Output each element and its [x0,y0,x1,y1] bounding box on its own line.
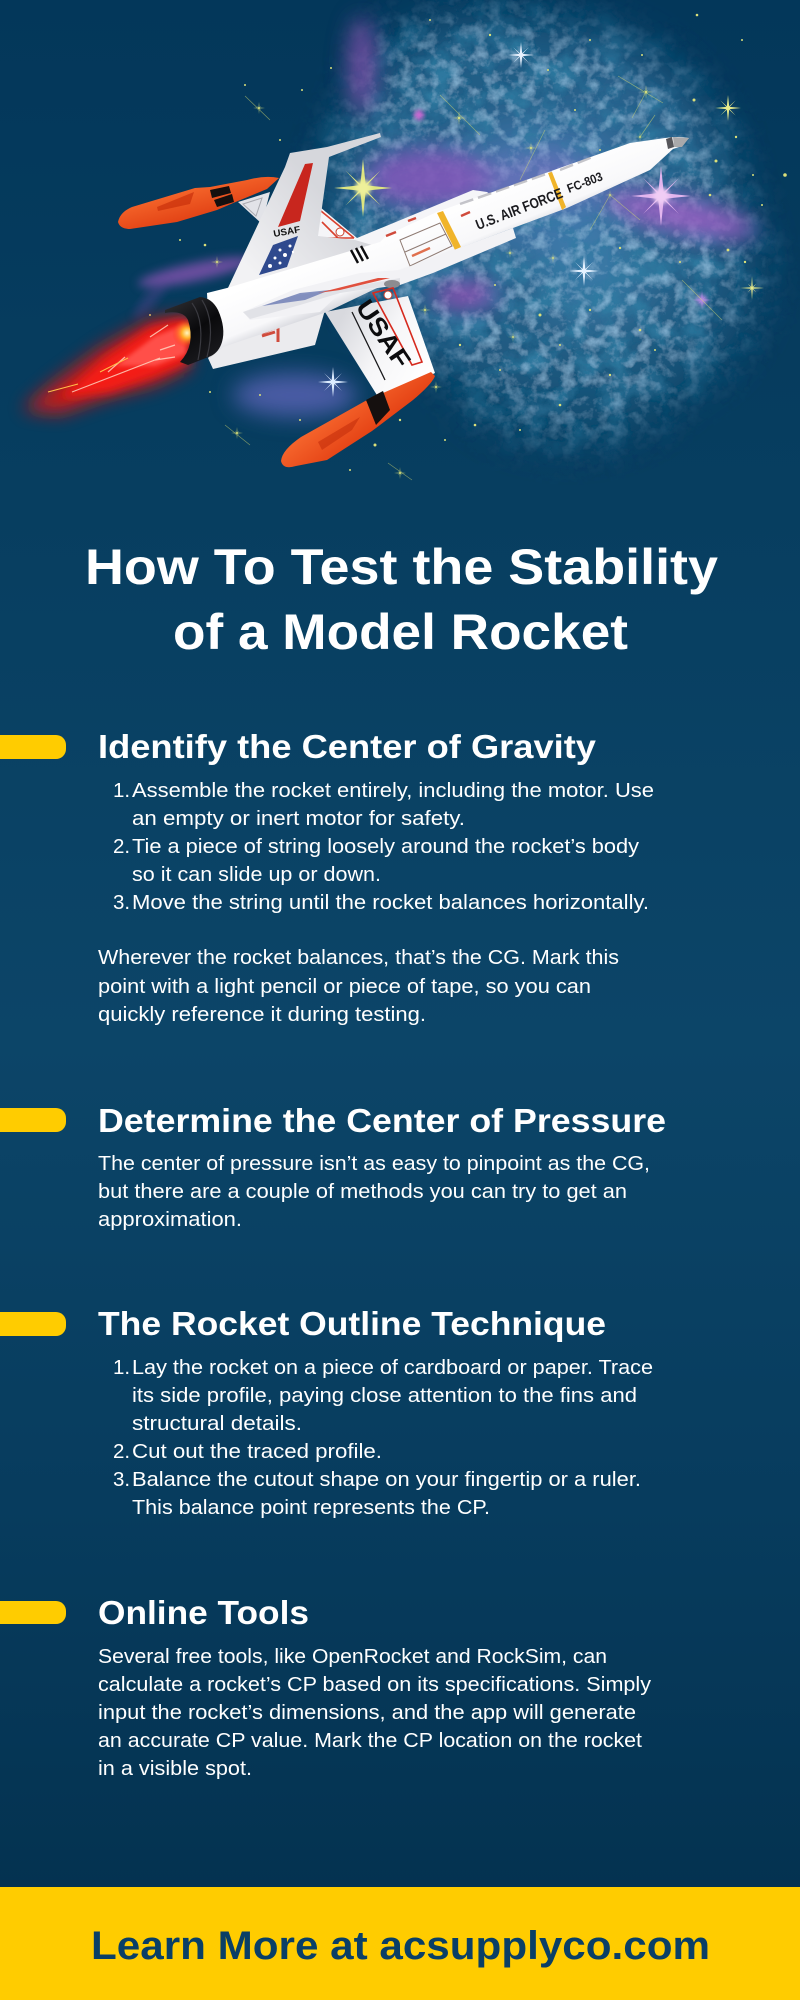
numbered steps: an empty or inert motor for safety. [132,807,465,830]
numbered steps: Move the string until the rocket balances horizontally. [132,891,649,914]
paragraph: in a visible spot. [98,1757,252,1780]
body marking: three stripes [351,246,368,263]
wing black rule [352,312,385,380]
closing paragraph: Wherever the rocket balances, that’s the CG. Mark this [98,946,619,969]
motor ring [165,297,223,365]
numbered steps: 3. [113,1468,130,1491]
top wing-tip tank [118,177,279,229]
wing USAF label: USAF [350,295,416,373]
paragraph [98,1152,650,1231]
wing red outline [373,288,422,365]
heading: Identify the Center of Gravity [98,728,597,765]
paragraph: input the rocket’s dimensions, and the app will generate [98,1701,636,1724]
body label: U.S. AIR FORCE [474,186,566,234]
marker bar [0,1601,66,1624]
title: of a Model Rocket [173,604,628,660]
panel: determine the center of pressure [0,1102,666,1231]
numbered steps: Assemble the rocket entirely, including the motor. Use [132,779,654,802]
closing paragraph: point with a light pencil or piece of tape, so you can [98,975,591,998]
numbered steps: structural details. [132,1412,302,1435]
heading: The Rocket Outline Technique [98,1305,606,1342]
fin USAF label: USAF [273,224,301,240]
paragraph: an accurate CP value. Mark the CP location on the rocket [98,1729,642,1752]
numbered steps: Tie a piece of string loosely around the rocket’s body [132,835,640,858]
far wing [238,190,505,262]
near wing [243,228,516,320]
numbered steps: so it can slide up or down. [132,863,381,886]
numbered steps: This balance point represents the CP. [132,1496,490,1519]
paragraph: calculate a rocket’s CP based on its specifications. Simply [98,1673,652,1696]
panel: the rocket outline technique [0,1305,653,1519]
rear ventral fin [208,310,325,369]
numbered steps: its side profile, paying close attention to the fins and [132,1384,637,1407]
paragraph: approximation. [98,1208,242,1231]
body panel lines [400,223,452,266]
purple nebula clouds [233,17,760,417]
numbered steps: 2. [113,1440,130,1463]
lower wing-tip tank [281,372,435,467]
marker bar [0,735,66,759]
title: How To Test the Stability [85,539,718,595]
upper body detail strip [460,156,595,204]
body serial label: FC-803 [565,169,605,196]
purple streak left of rocket [136,251,254,293]
numbered steps: Balance the cutout shape on your fingertip or a ruler. [132,1468,641,1491]
lower wing [325,288,435,400]
numbered steps: Cut out the traced profile. [132,1440,382,1463]
title [85,539,718,660]
numbered steps: 1. [113,1356,130,1379]
panel: identify the center of gravity [0,728,654,1026]
fin flag [259,236,298,275]
numbered steps: Lay the rocket on a piece of cardboard or paper. Trace [132,1356,653,1379]
stars [149,14,787,480]
numbered steps: 1. [113,779,130,802]
panel: online tools [0,1594,652,1780]
paragraph: The center of pressure isn’t as easy to pinpoint as the CG, [98,1152,650,1175]
numbered steps: 3. [113,891,130,914]
heading: Determine the Center of Pressure [98,1102,666,1139]
numbered steps [113,1356,653,1519]
closing paragraph [98,946,619,1026]
fin red stripe [278,163,313,227]
marker bar [0,1312,66,1336]
vertical tail fin [227,133,381,300]
paragraph: but there are a couple of methods you can try to get an [98,1180,627,1203]
paragraph [98,1645,652,1780]
numbered steps: 2. [113,835,130,858]
closing paragraph: quickly reference it during testing. [98,1003,426,1026]
footer banner [0,1887,800,2000]
heading: Online Tools [98,1594,309,1631]
footer call to action: Learn More at acsupplyco.com [91,1924,710,1968]
marker bar [0,1108,66,1132]
numbered steps [113,779,654,914]
flame [22,315,202,414]
body bands [437,172,566,250]
galaxy nebula [330,15,755,435]
purple glow [131,278,169,322]
paragraph: Several free tools, like OpenRocket and RockSim, can [98,1645,607,1668]
rocket body [207,137,689,358]
nose tip [673,137,689,147]
illustration: rocket over galaxy [22,14,787,480]
